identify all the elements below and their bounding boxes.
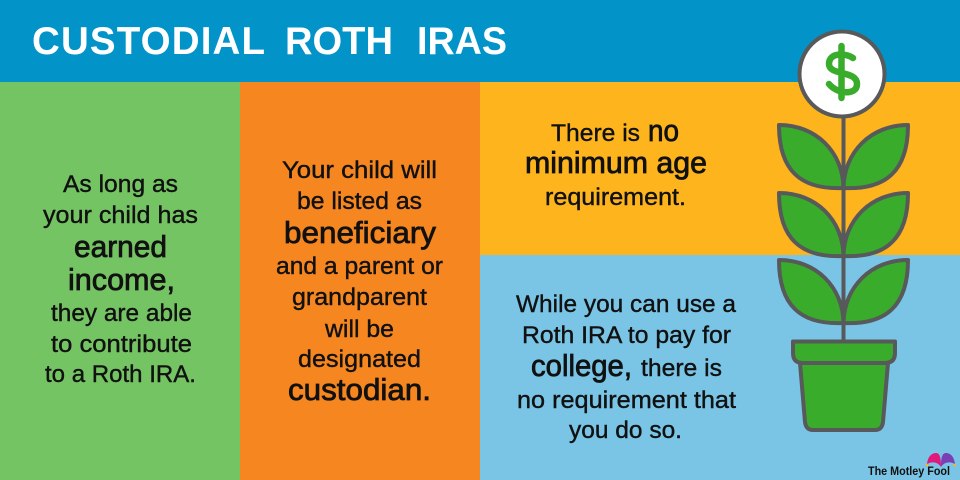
panel: earned income: they are able bbox=[51, 300, 192, 327]
panel: college: you do so. bbox=[569, 417, 682, 444]
panel: no minimum age: There is bbox=[551, 120, 640, 147]
panel: college: there is bbox=[641, 355, 722, 382]
title: CUSTODIAL bbox=[32, 20, 265, 63]
panel: beneficiary and custodian: grandparent bbox=[292, 284, 427, 311]
panel: earned income: to contribute bbox=[51, 331, 192, 358]
panel: no minimum age bbox=[480, 82, 960, 255]
panel: earned income: As long as bbox=[63, 171, 178, 198]
panel: beneficiary and custodian: be listed as bbox=[297, 188, 422, 215]
panel: beneficiary and custodian: Your child will bbox=[282, 157, 437, 184]
panel: earned income: your child has bbox=[43, 202, 198, 229]
panel: beneficiary and custodian: designated bbox=[298, 346, 421, 373]
panel: earned income bbox=[0, 82, 240, 480]
panel: beneficiary and custodian: beneficiary bbox=[284, 216, 437, 250]
panel: college: college, bbox=[531, 349, 632, 383]
panel: beneficiary and custodian bbox=[240, 82, 480, 480]
title bbox=[32, 20, 507, 63]
icon: money plant bbox=[779, 32, 908, 430]
title: ROTH bbox=[285, 20, 393, 63]
panel: no minimum age: minimum age bbox=[525, 146, 707, 180]
logo: The Motley Fool bbox=[868, 453, 956, 478]
panel: beneficiary and custodian: and a parent or bbox=[276, 253, 443, 280]
logo: The Motley Fool: The Motley Fool bbox=[868, 466, 950, 478]
panel: beneficiary and custodian: custodian. bbox=[288, 373, 431, 407]
panel: college bbox=[480, 255, 960, 480]
title: IRAS bbox=[417, 20, 507, 63]
panel: college: Roth IRA to pay for bbox=[522, 322, 731, 349]
panel: beneficiary and custodian: will be bbox=[324, 316, 394, 343]
header band bbox=[0, 0, 960, 82]
panel: college: While you can use a bbox=[516, 291, 736, 318]
panel: earned income: income, bbox=[68, 263, 175, 297]
panel: college: no requirement that bbox=[517, 387, 736, 414]
panel: no minimum age: requirement. bbox=[545, 184, 686, 211]
panel: earned income: earned bbox=[74, 230, 167, 264]
panel: earned income: to a Roth IRA. bbox=[45, 361, 196, 388]
panel: no minimum age: no bbox=[648, 114, 679, 148]
